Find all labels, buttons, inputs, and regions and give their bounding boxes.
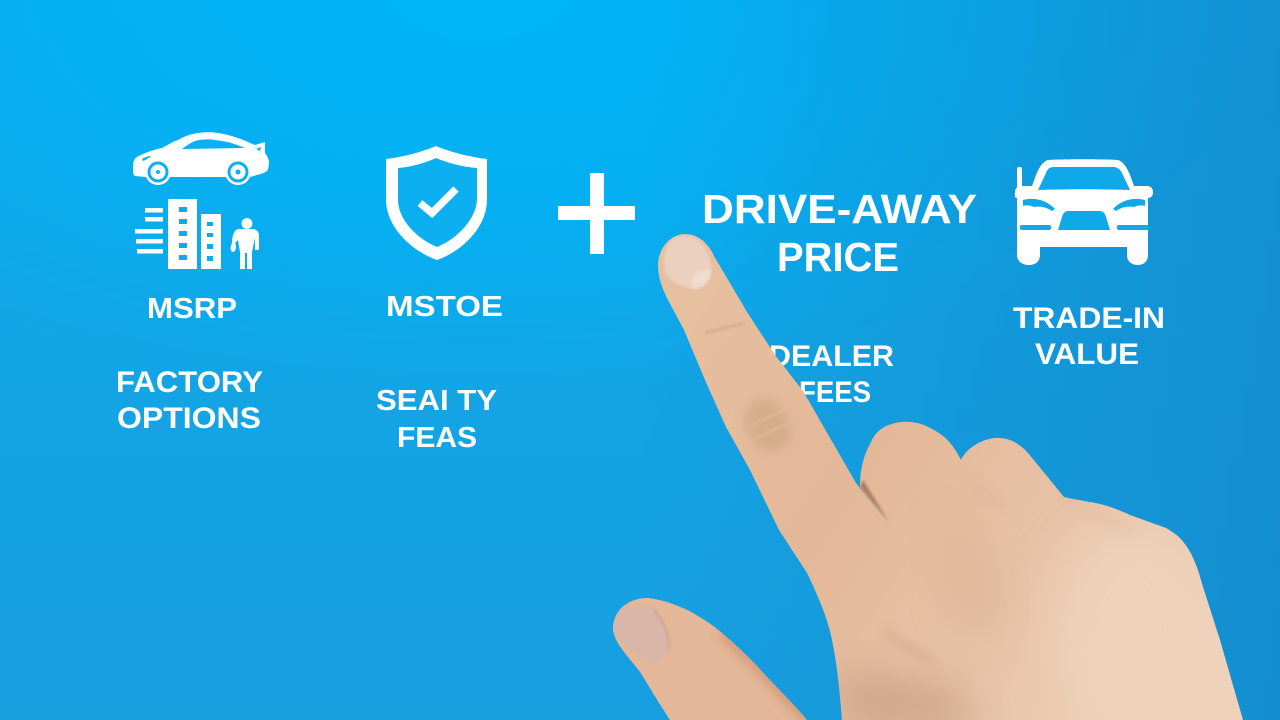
- person: [231, 218, 259, 269]
- icon: sedan car: [133, 132, 269, 185]
- label: factory options: FACTORY: [116, 366, 263, 399]
- label: trade-in value: [1013, 302, 1165, 371]
- icon: front-view car: [1015, 159, 1153, 265]
- label: MSTOE: MSTOE: [386, 291, 503, 323]
- icon: plus sign: [558, 173, 635, 254]
- icon: buildings with person: [135, 199, 259, 269]
- label: dealer fees: [769, 340, 894, 409]
- label: dealer fees: DEALER: [769, 340, 894, 373]
- gap between index and middle finger: [860, 480, 889, 522]
- heading: drive-away price: PRICE: [777, 234, 899, 280]
- fingernail: [664, 236, 711, 288]
- label: trade-in value: TRADE-IN: [1013, 302, 1165, 335]
- heading: drive-away price: DRIVE-AWAY: [702, 186, 977, 232]
- thumb: [613, 598, 807, 720]
- label: safety fees: FEAS: [397, 422, 477, 454]
- finger creases: [705, 323, 745, 333]
- icon: shield with check: [386, 146, 487, 260]
- label: MSRP: MSRP: [147, 293, 237, 325]
- label: safety fees: [376, 385, 497, 454]
- label: trade-in value: VALUE: [1035, 338, 1139, 371]
- index finger and back of hand: [640, 220, 1260, 720]
- label: dealer fees: FEES: [799, 376, 871, 409]
- label: factory options: OPTIONS: [117, 402, 261, 435]
- label: factory options: [116, 366, 263, 435]
- short building: [201, 214, 221, 269]
- label: safety fees: SEAI TY: [376, 385, 497, 417]
- tall building: [168, 199, 197, 269]
- heading: drive-away price: [702, 186, 977, 280]
- speed lines: [135, 208, 163, 254]
- photo: hand pointing: [600, 220, 1260, 720]
